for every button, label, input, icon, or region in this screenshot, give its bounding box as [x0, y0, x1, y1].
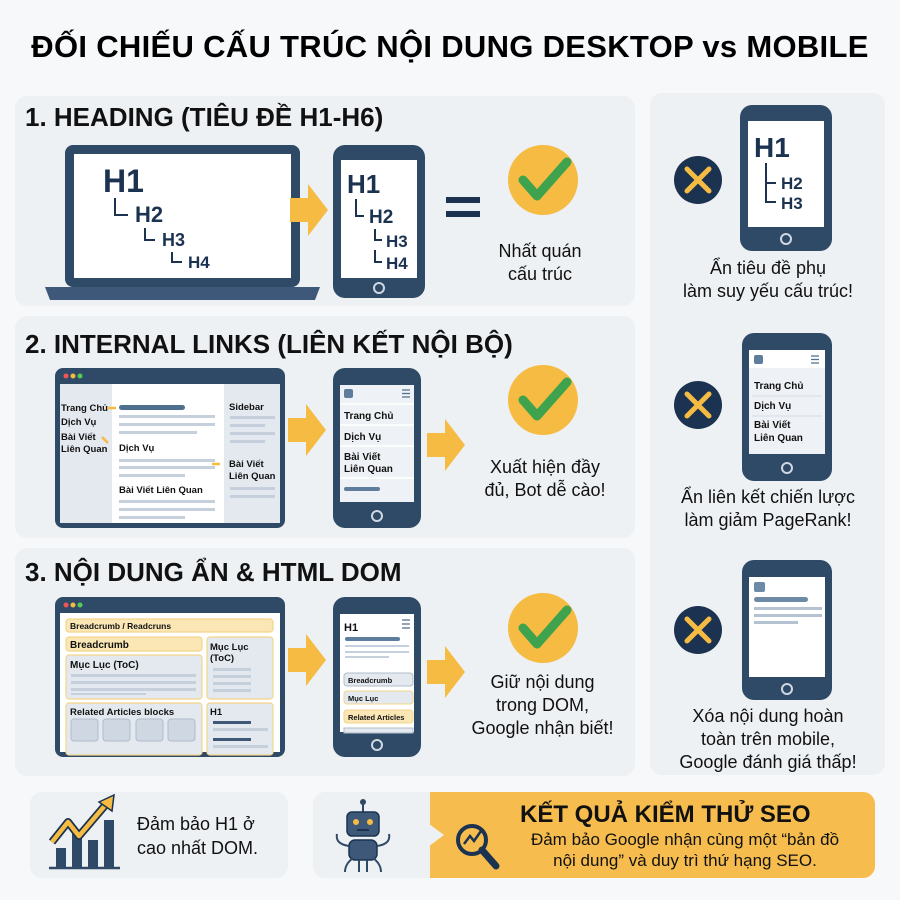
- right caption 2: Ẩn liên kết chiến lược: [681, 487, 855, 507]
- caption 2: Xuất hiện đầy: [490, 457, 600, 477]
- right caption 2: làm giảm PageRank!: [684, 510, 852, 530]
- phone 3: H1: [344, 622, 358, 634]
- caption 2: đủ, Bot dễ cào!: [484, 480, 606, 500]
- arrow 2a: [288, 404, 326, 456]
- right caption 3: toàn trên mobile,: [701, 729, 835, 749]
- browser 2: Bài Viết Liên Quan: [119, 485, 203, 496]
- right caption 2: [681, 486, 855, 530]
- phone 2: Trang Chủ: [344, 411, 393, 422]
- right: x 2 + phone: Bài Viết: [754, 419, 791, 431]
- right caption 1: [683, 258, 853, 301]
- right caption 1: Ẩn tiêu đề phụ: [710, 258, 826, 278]
- phone 3: [333, 597, 421, 757]
- browser 3: Mục Lục (ToC): [70, 660, 139, 671]
- panel: heading: [15, 96, 635, 306]
- browser 2: Liên Quan: [229, 471, 276, 482]
- right: x 2 + phone: Liên Quan: [754, 433, 803, 444]
- caption 1: Nhất quán: [498, 241, 582, 261]
- phone 3: Breadcrumb: [348, 676, 393, 685]
- browser 3: [55, 597, 285, 757]
- heading 2: 2. INTERNAL LINKS (LIÊN KẾT NỘI BỘ): [25, 329, 513, 359]
- browser 3: Related Articles blocks: [70, 707, 174, 718]
- phone 3: Related Articles: [348, 713, 404, 722]
- bottom left text: cao nhất DOM.: [137, 838, 258, 858]
- browser 3: Breadcrumb: [70, 640, 129, 651]
- phone 2: Dịch Vụ: [344, 432, 381, 443]
- result text: Đảm bảo Google nhận cùng một “bản đồ: [531, 830, 839, 849]
- caption 1: cấu trúc: [508, 264, 572, 284]
- check 2: [508, 365, 578, 435]
- browser 3: Mục Lục: [210, 642, 249, 653]
- browser 3: Breadcrumb / Readcruns: [70, 621, 171, 631]
- laptop: [45, 145, 320, 300]
- browser 3: (ToC): [210, 653, 234, 664]
- bottom left text: [137, 814, 258, 858]
- right: x 3 + phone: [674, 560, 832, 700]
- caption 2: [484, 457, 606, 500]
- caption 3: [471, 672, 614, 738]
- check 3: [508, 593, 578, 663]
- right caption 3: Xóa nội dung hoàn: [692, 706, 844, 726]
- title: ĐỐI CHIẾU CẤU TRÚC NỘI DUNG DESKTOP vs MOBILE: [31, 29, 869, 64]
- right caption 3: [679, 706, 857, 772]
- browser 2: [55, 368, 285, 528]
- phone 2: [333, 368, 421, 528]
- arrow 3b: [427, 646, 465, 698]
- browser 2: Dịch Vụ: [61, 417, 97, 428]
- caption 1: [498, 241, 582, 284]
- right: x 1 + phone: H2: [781, 174, 803, 193]
- phone 1: H3: [386, 232, 408, 251]
- icon: magnifier: [456, 824, 500, 870]
- phone 1: H1: [347, 169, 380, 199]
- check 1: [508, 145, 578, 215]
- browser 2: Trang Chủ: [61, 403, 108, 414]
- icon: robot: [336, 799, 390, 872]
- panel: hidden content: [15, 548, 635, 776]
- phone 2: Liên Quan: [344, 464, 393, 475]
- browser 2: Bài Viết: [61, 432, 97, 443]
- phone 1: [333, 145, 425, 298]
- laptop: H1: [103, 163, 144, 199]
- right caption 3: Google đánh giá thấp!: [679, 752, 857, 772]
- browser 2: Liên Quan: [61, 444, 108, 455]
- orange result box: [430, 792, 875, 878]
- right: x 2 + phone: [674, 333, 832, 481]
- heading 3: 3. NỘI DUNG ẨN & HTML DOM: [25, 557, 402, 587]
- bottom result panel: [313, 792, 875, 878]
- browser 2: Sidebar: [229, 402, 264, 413]
- right: x 1 + phone: [674, 105, 832, 251]
- arrow 2b: [427, 419, 465, 471]
- laptop: H4: [188, 253, 210, 272]
- laptop: H2: [135, 202, 163, 227]
- caption 3: trong DOM,: [496, 695, 589, 715]
- result text: nội dung” và duy trì thứ hạng SEO.: [553, 851, 817, 870]
- right: x 1 + phone: H1: [754, 132, 790, 163]
- right: x 1 + phone: H3: [781, 194, 803, 213]
- bottom left text: Đảm bảo H1 ở: [137, 814, 255, 834]
- panel: mobile mistakes: [650, 93, 885, 775]
- right: x 2 + phone: Trang Chủ: [754, 381, 803, 392]
- phone 3: Mục Lục: [348, 694, 378, 703]
- right caption 1: làm suy yếu cấu trúc!: [683, 281, 853, 301]
- heading 1: 1. HEADING (TIÊU ĐỀ H1-H6): [25, 102, 383, 132]
- panel: internal links: [15, 316, 635, 538]
- browser 2: Dịch Vụ: [119, 443, 155, 454]
- equals: [446, 200, 480, 214]
- right: x 2 + phone: Dịch Vụ: [754, 401, 791, 412]
- browser 3: H1: [210, 707, 223, 718]
- arrow 3a: [288, 634, 326, 686]
- icon: growth chart: [49, 795, 120, 868]
- laptop: H3: [162, 230, 185, 250]
- result text: [531, 832, 838, 870]
- phone 1: H2: [369, 207, 393, 228]
- browser 2: Bài Viết: [229, 459, 265, 470]
- caption 3: Giữ nội dung: [490, 672, 595, 692]
- caption 3: Google nhận biết!: [471, 718, 614, 738]
- phone 2: Bài Viết: [344, 451, 381, 463]
- result heading: KẾT QUẢ KIỂM THỬ SEO: [520, 801, 811, 828]
- arrow 1: [290, 184, 328, 236]
- phone 1: H4: [386, 254, 408, 273]
- bottom left panel: [30, 792, 288, 878]
